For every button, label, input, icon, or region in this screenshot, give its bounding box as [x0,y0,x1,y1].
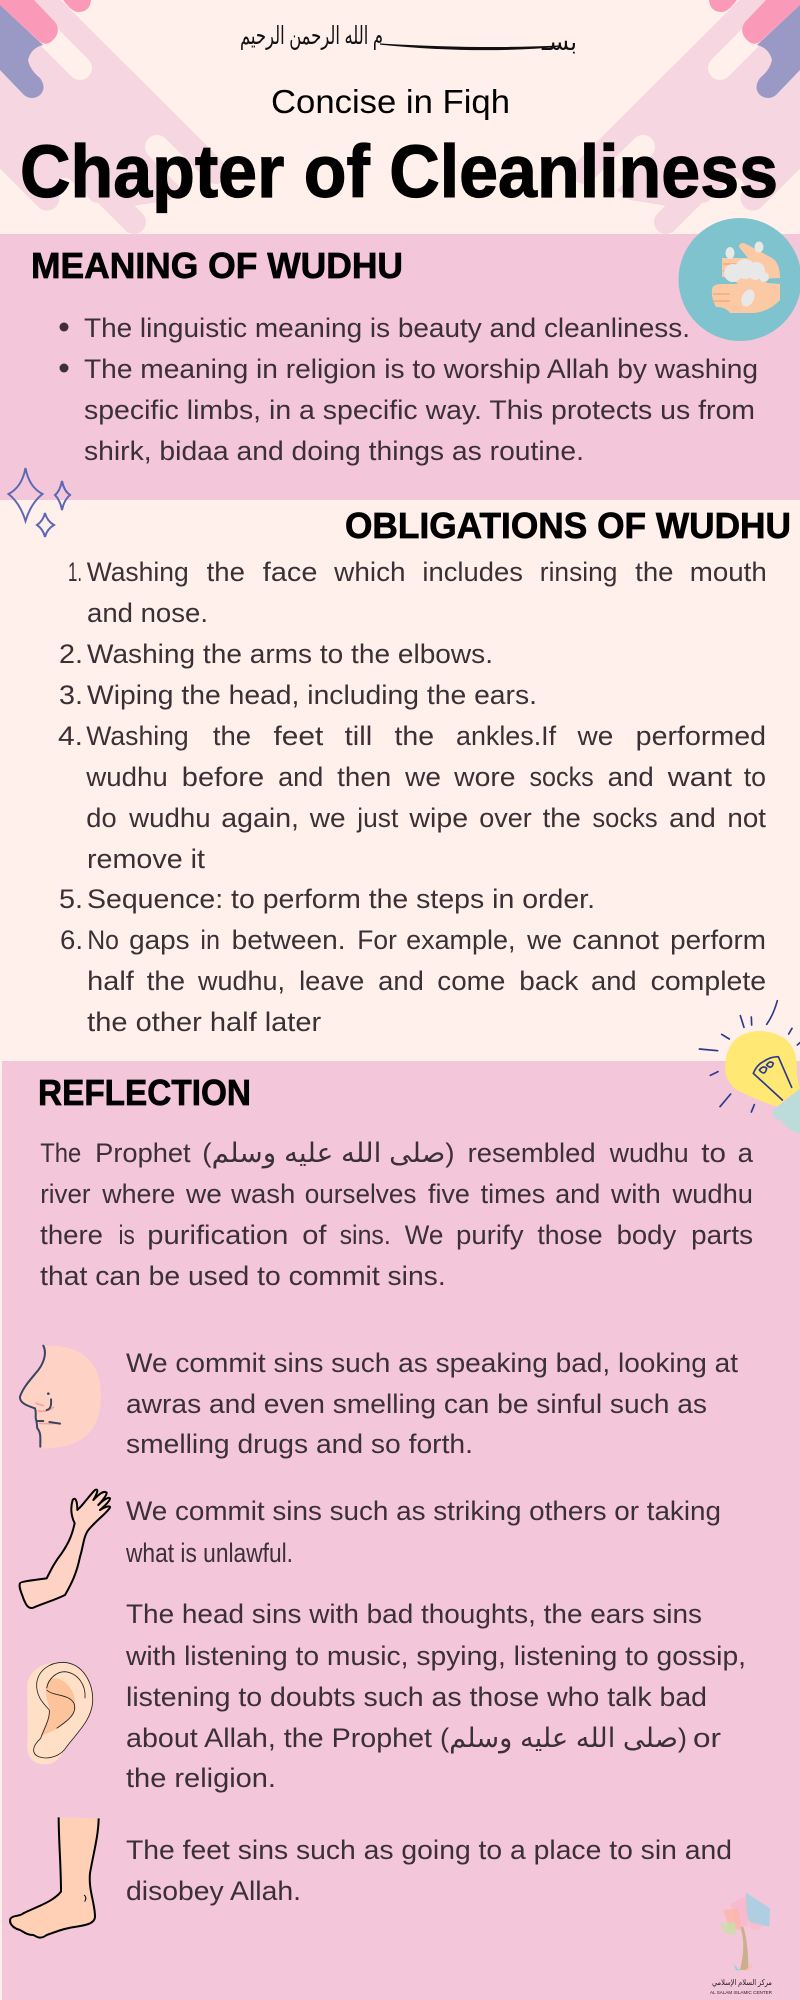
subtitle: Concise in Fiqh [271,83,510,120]
text: face sins: awras and even smelling can be sinful such as [126,1389,707,1419]
item 4: do [86,803,117,833]
item 6: cannot [572,925,659,955]
text: head and ear sins: The head sins with bad thoughts, the ears sins [126,1599,702,1629]
item 4: to [744,762,766,792]
item 1: which [333,557,406,587]
item 1: the [635,557,674,587]
item 4: feet [274,721,324,751]
text: head and ear sins: (صلى الله عليه وسلم) [440,1723,687,1754]
item 5: 5. [59,884,83,914]
item 4: want [667,762,733,792]
reflection paragraph: where [101,1179,175,1209]
icon: arm [20,1490,110,1608]
item 4: and [669,803,716,833]
item 2: 2. [59,639,83,669]
item 1: face [263,557,317,587]
item 4: remove it [87,844,206,874]
text: feet sins: disobey Allah. [126,1876,301,1906]
icon: sparkles [8,468,70,537]
item 2: Washing the arms to the elbows. [87,639,493,669]
icon: washing hands [678,218,800,341]
item 4: Washing [86,721,189,751]
reflection paragraph: parts [691,1220,753,1250]
item 1: rinsing [540,557,617,587]
reflection paragraph: ourselves [305,1179,416,1209]
logo tree [720,1893,770,1971]
item 6: back [519,966,579,996]
reflection paragraph: We [405,1220,443,1250]
text: arm sins: We commit sins such as striking others or taking [126,1496,721,1526]
item 1: Washing [87,557,189,587]
reflection paragraph: body [617,1220,677,1250]
reflection paragraph: river [40,1179,91,1209]
item 4: we [576,721,613,751]
item 4: the [543,803,581,833]
item 6: the [147,966,185,996]
reflection paragraph [40,1138,754,1291]
item 4: the [394,721,434,751]
item 4: just [356,803,399,833]
reflection paragraph: purification [147,1220,288,1250]
icon: light bulb with fist [699,1001,800,1133]
item 6: wudhu, [197,966,285,996]
text: head and ear sins: with listening to music, spying, listening to gossip, [125,1641,746,1671]
reflection paragraph: wash [230,1179,295,1209]
item 4: before [182,762,264,792]
item 1: includes [422,557,523,587]
reflection paragraph: is [118,1220,135,1250]
bullet list: meanings: shirk, bidaa and doing things as routine. [84,436,584,466]
item 4: wore [453,762,516,792]
basmala calligraphy [240,22,577,56]
item 4: and [278,762,323,792]
reflection paragraph: those [537,1220,603,1250]
text: face sins: smelling drugs and so forth. [126,1429,473,1459]
text: face sins: We commit sins such as speaking bad, looking at [126,1348,739,1378]
numbered list: obligations [58,557,767,1037]
item 1: mouth [690,557,767,587]
item 4: and [608,762,654,792]
icon: ear [27,1662,93,1764]
item 6: gaps [129,925,190,955]
item 6: leave [299,966,364,996]
item 4: not [727,803,766,833]
item 3: Wiping the head, including the ears. [87,680,537,710]
bullet list: meanings: The meaning in religion is to worship Allah by washing [84,354,758,384]
item 6: between. [232,925,346,955]
icon: face profile [20,1346,101,1448]
text: arm sins [125,1496,721,1568]
reflection paragraph: five [428,1179,470,1209]
reflection paragraph: wudhu [671,1179,753,1209]
item 6: 6. [60,925,83,955]
item 4: over [479,803,532,833]
reflection paragraph: that can be used to commit sins. [40,1261,446,1291]
item 6: the other half later [87,1007,321,1037]
item 4: socks [530,762,594,792]
bullet list: meanings [60,313,758,466]
text: feet sins [126,1835,732,1906]
item 1 [68,557,767,628]
item 6 [60,925,766,1037]
reflection paragraph: we [185,1179,222,1209]
basmala calligraphy: بسـ [541,29,577,56]
heading: obligations of wudhu: OBLIGATIONS OF WUDHU [345,505,791,546]
reflection paragraph: with [610,1179,661,1209]
item 4: again, [221,803,299,833]
text: arm sins: what is unlawful. [125,1538,293,1568]
reflection paragraph: times [481,1179,545,1209]
item 1: 1. [68,557,82,587]
text: head and ear sins: about Allah, the Prophet [126,1723,433,1753]
item 1: the [207,557,245,587]
item 6: in [200,925,220,955]
item 6: complete [651,966,766,996]
reflection paragraph: of [302,1220,327,1250]
decorative corner shapes: top right [575,0,800,237]
item 4: wudhu [128,803,211,833]
text: face sins [126,1348,739,1459]
item 6: and [591,966,637,996]
item 4: wudhu [85,762,168,792]
reflection paragraph: and [555,1179,600,1209]
reflection paragraph: resembled [468,1138,596,1168]
item 4: till [345,721,372,751]
item 4: then [337,762,391,792]
item 3: 3. [59,680,83,710]
item 6: we [526,925,562,955]
basmala calligraphy: م الله الرحمن الرحيم [240,22,383,51]
reflection paragraph: (صلى الله عليه وسلم) [202,1138,455,1169]
decorative corner shapes: top left [0,0,225,237]
panel: reflection [2,1061,800,2000]
reflection paragraph: there [40,1220,103,1250]
item 4 [58,721,766,874]
item 6: For [357,925,397,955]
reflection paragraph: The [40,1138,81,1168]
item 6: example, [406,925,516,955]
item 6: come [437,966,505,996]
item 4: performed [636,721,766,751]
reflection paragraph: purify [456,1220,524,1250]
reflection paragraph: Prophet [95,1138,191,1168]
item 4: wipe [408,803,468,833]
reflection paragraph: wudhu [609,1138,689,1168]
heading: meaning of wudhu: MEANING OF WUDHU [31,245,403,286]
item 4: socks [592,803,658,833]
panel: meaning of wudhu [0,234,800,500]
icon: foot [10,1817,99,1938]
reflection paragraph: a [738,1138,754,1168]
text: head and ear sins: the religion. [126,1763,276,1793]
logo: Al Salam Islamic Center [710,1893,773,1995]
item 6: half [87,966,134,996]
text: head and ear sins: listening to doubts such as those who talk bad [126,1682,707,1712]
heading: reflection: REFLECTION [38,1072,251,1113]
item 6: perform [670,925,766,955]
bullet list: meanings: The linguistic meaning is beauty and cleanliness. [84,313,690,343]
item 1: and nose. [87,598,208,628]
text: head and ear sins: or [693,1723,721,1753]
item 4: we [309,803,346,833]
item 4: the [213,721,251,751]
item 4: ankles.If [456,721,557,751]
item 6: and [378,966,424,996]
item 5: Sequence: to perform the steps in order. [87,884,595,914]
item 4: we [404,762,441,792]
text: feet sins: The feet sins such as going to a place to sin and [126,1835,732,1865]
logo: Al Salam Islamic Center: مركز السلام الإسلامي [712,1978,772,1988]
item 4: 4. [58,721,83,751]
reflection paragraph: sins. [340,1220,391,1250]
title: Chapter of Cleanliness [20,130,778,213]
reflection paragraph: to [701,1138,726,1168]
logo: Al Salam Islamic Center: AL SALAM ISLAMIC CENTER [710,1990,773,1995]
item 6: No [87,925,119,955]
bullet list: meanings: specific limbs, in a specific way. This protects us from [84,395,755,425]
text: head and ear sins [125,1599,746,1793]
